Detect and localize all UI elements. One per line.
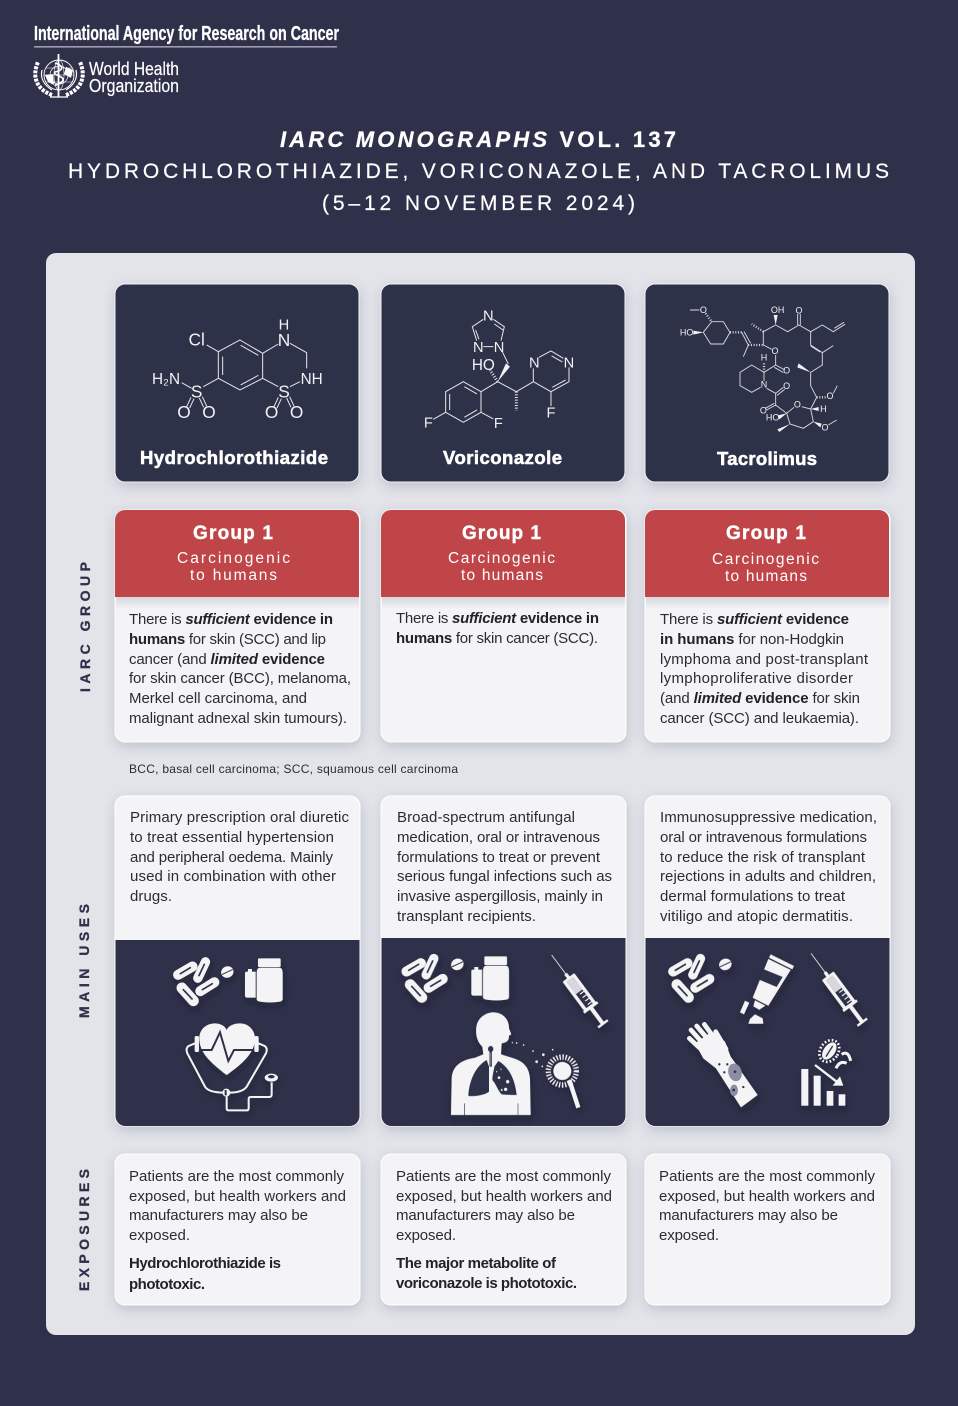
icon: WHO emblem	[35, 54, 83, 97]
panel: main uses hydrochlorothiazide: and peripheral oedema. Mainly	[130, 849, 334, 866]
IARC and WHO logo block	[34, 23, 339, 97]
panel: IARC group voriconazole: to humans	[461, 567, 543, 584]
icons: pills, bottles, heart and stethoscope	[171, 956, 283, 1110]
chemical structure: voriconazole: N	[494, 340, 504, 356]
panel: IARC group tacrolimus: Group 1	[726, 523, 806, 544]
panel: IARC group hydrochlorothiazide: Merkel cell carcinoma, and	[129, 690, 307, 707]
panel: main uses voriconazole: formulations to treat or prevent	[397, 849, 601, 866]
panel: exposures voriconazole	[381, 1154, 626, 1305]
panel: IARC group voriconazole: humans for skin cancer (SCC).	[396, 630, 598, 647]
panel: IARC group hydrochlorothiazide: Group 1	[193, 523, 273, 544]
dark icon area	[646, 938, 890, 1126]
chemical structure: tacrolimus: O	[700, 305, 707, 315]
title	[68, 127, 889, 215]
row label: IARC group: IARC GROUP	[77, 562, 93, 692]
panel: IARC group hydrochlorothiazide	[115, 510, 360, 742]
icons: pills, syringe, lungs, fungus	[400, 950, 611, 1115]
panel: IARC group hydrochlorothiazide: malignant adnexal skin tumours).	[129, 710, 347, 727]
chemical structure: voriconazole: N	[564, 355, 574, 371]
panel: exposures hydrochlorothiazide: manufacturers may also be	[129, 1207, 308, 1224]
chemical structure: voriconazole: N	[529, 355, 540, 371]
chemical structure: hydrochlorothiazide: H₂N	[152, 371, 180, 388]
panel: IARC group tacrolimus: Carcinogenic	[712, 551, 819, 568]
title: IARC MONOGRAPHS VOL. 137	[280, 127, 676, 152]
icon: round tablet	[449, 957, 465, 972]
chemical structure: hydrochlorothiazide: H	[279, 317, 289, 333]
evidence text: There is sufficient evidence in	[129, 611, 333, 628]
evidence text: There is sufficient evidence	[660, 611, 849, 628]
icons: pills, cream, syringe, hand, chart	[666, 948, 870, 1107]
panel: exposures hydrochlorothiazide: Hydrochlorothiazide is	[129, 1255, 281, 1272]
panel: main uses tacrolimus: vitiligo and atopic dermatitis.	[660, 908, 853, 925]
panel: main uses hydrochlorothiazide: used in combination with other	[130, 868, 336, 885]
uses text: Immunosuppressive medication,	[660, 809, 877, 826]
panel: main uses voriconazole: serious fungal infections such as	[397, 868, 612, 885]
chemical structure: hydrochlorothiazide: O	[202, 402, 216, 422]
drug name: Voriconazole	[443, 447, 562, 468]
panel: main uses tacrolimus: to reduce the risk of transplant	[660, 849, 866, 866]
panel: hydrochlorothiazide structure	[115, 284, 359, 482]
panel: main uses voriconazole: invasive aspergillosis, mainly in	[397, 888, 603, 905]
chemical structure: tacrolimus: OH	[771, 305, 784, 315]
panel: main uses hydrochlorothiazide: to treat essential hypertension	[130, 829, 334, 846]
chemical structure: tacrolimus: O	[783, 381, 790, 391]
chemical structure: hydrochlorothiazide: Cl	[188, 329, 205, 349]
chemical structure: tacrolimus: H	[761, 352, 767, 362]
panel: IARC group voriconazole: Group 1	[462, 523, 541, 544]
panel: IARC group tacrolimus: to humans	[725, 568, 807, 585]
dark icon area	[116, 940, 360, 1126]
chemical structure: tacrolimus: HO	[680, 328, 693, 338]
chemical structure: voriconazole: HO	[472, 357, 495, 374]
chemical structure: hydrochlorothiazide: O	[290, 402, 303, 422]
panel: main uses tacrolimus	[645, 796, 890, 1126]
chemical structure: voriconazole: F	[424, 415, 433, 431]
chemical structure: tacrolimus: O	[795, 306, 802, 316]
panel: main uses tacrolimus: rejections in adults and children,	[660, 868, 876, 885]
agency name: International Agency for Research on Cancer	[34, 23, 339, 45]
chemical structure: tacrolimus: O	[821, 422, 828, 432]
chemical structure: tacrolimus: H	[820, 404, 827, 414]
row label: exposures: EXPOSURES	[76, 1169, 92, 1291]
red group header	[645, 510, 889, 597]
icon: hand with skin patches	[689, 1024, 758, 1107]
panel: exposures tacrolimus	[645, 1154, 890, 1305]
chemical structure: voriconazole	[424, 309, 574, 432]
icon: round tablet	[219, 964, 235, 980]
chemical structure: tacrolimus	[680, 305, 845, 432]
main light panel	[46, 253, 915, 1335]
panel: main uses tacrolimus: oral or intravenous formulations	[660, 829, 867, 846]
chemical structure: hydrochlorothiazide: NH	[301, 371, 323, 388]
panel: IARC group hydrochlorothiazide: cancer (and limited evidence	[129, 651, 325, 668]
panel: exposures hydrochlorothiazide: exposed.	[129, 1227, 190, 1244]
panel: IARC group tacrolimus: cancer (SCC) and leukaemia).	[660, 710, 859, 727]
panel: main uses voriconazole: medication, oral or intravenous	[397, 829, 600, 846]
panel: main uses hydrochlorothiazide	[115, 796, 360, 1126]
organisation name: World Health	[89, 59, 179, 79]
panel: IARC group tacrolimus: (and limited evidence for skin	[660, 690, 860, 707]
chemical structure: hydrochlorothiazide: S	[191, 381, 202, 401]
panel: tacrolimus structure	[645, 284, 889, 482]
chemical structure: tacrolimus: O	[760, 406, 767, 416]
panel: IARC group tacrolimus: lymphoproliferative disorder	[660, 670, 853, 687]
title: (5–12 NOVEMBER 2024)	[322, 192, 635, 215]
icon: spores and fungus	[512, 1042, 578, 1108]
chemical structure: hydrochlorothiazide: N	[278, 330, 290, 350]
chemical structure: hydrochlorothiazide: O	[177, 402, 191, 422]
panel: exposures hydrochlorothiazide	[115, 1154, 360, 1305]
IARC and WHO logo block: Organization	[89, 76, 179, 96]
chemical structure: tacrolimus: O	[794, 400, 801, 410]
icon: cream tube	[740, 954, 794, 1024]
panel: voriconazole structure	[381, 284, 625, 482]
uses text: Primary prescription oral diuretic	[130, 809, 350, 826]
chemical structure: voriconazole: N	[473, 340, 484, 356]
chemical structure: hydrochlorothiazide	[152, 317, 323, 422]
panel: IARC group tacrolimus: lymphoma and post-transplant	[660, 651, 869, 668]
chemical structure: voriconazole: F	[547, 405, 556, 421]
chemical structure: tacrolimus: O	[783, 366, 790, 376]
panel: exposures hydrochlorothiazide: exposed, but health workers and	[129, 1188, 346, 1205]
chemical structure: hydrochlorothiazide: S	[278, 381, 290, 401]
icon: heart and stethoscope	[187, 1023, 278, 1110]
chemical structure: voriconazole: F	[494, 416, 503, 432]
icon: human body with lungs	[451, 1012, 531, 1115]
panel: exposures voriconazole: voriconazole is phototoxic.	[396, 1275, 577, 1292]
red group header	[381, 510, 625, 597]
chemical structure: hydrochlorothiazide: O	[265, 402, 278, 422]
icon: round tablet	[717, 957, 733, 972]
panel: exposures tacrolimus: exposed, but health workers and	[659, 1188, 875, 1205]
panel: IARC group hydrochlorothiazide: humans for skin (SCC) and lip	[129, 631, 326, 648]
panel: IARC group hydrochlorothiazide: Carcinogenic	[177, 550, 290, 567]
chemical structure: tacrolimus: N	[761, 379, 767, 389]
panel: IARC group voriconazole	[381, 510, 626, 742]
panel: exposures tacrolimus: Patients are the most commonly	[659, 1168, 876, 1185]
panel: exposures voriconazole: manufacturers may also be	[396, 1207, 575, 1224]
chemical structure: tacrolimus: O	[771, 346, 778, 356]
icon: declining bars and pathogen	[801, 1036, 851, 1106]
panel: main uses voriconazole: transplant recipients.	[397, 908, 536, 925]
panel: IARC group hydrochlorothiazide: to humans	[190, 567, 277, 584]
title: HYDROCHLOROTHIAZIDE, VORICONAZOLE, AND TACROLIMUS	[68, 160, 889, 183]
panel: IARC group tacrolimus: in humans for non-Hodgkin	[660, 631, 844, 648]
panel: IARC group tacrolimus	[645, 510, 890, 742]
panel: exposures hydrochlorothiazide: Patients are the most commonly	[129, 1168, 344, 1185]
panel: exposures voriconazole: The major metabolite of	[396, 1255, 557, 1272]
chemical structure: tacrolimus: HO	[766, 413, 779, 423]
panel: exposures voriconazole: exposed.	[396, 1227, 456, 1244]
footnote: BCC, basal cell carcinoma; SCC, squamous cell carcinoma	[129, 762, 458, 776]
panel: exposures tacrolimus: manufacturers may also be	[659, 1207, 838, 1224]
evidence text: There is sufficient evidence in	[396, 610, 599, 627]
panel: main uses tacrolimus: dermal formulations to treat	[660, 888, 846, 905]
panel: main uses voriconazole	[381, 796, 626, 1126]
uses text: Broad-spectrum antifungal	[397, 809, 575, 826]
dark icon area	[382, 938, 626, 1126]
panel: IARC group voriconazole: Carcinogenic	[448, 550, 555, 567]
panel: exposures voriconazole: Patients are the most commonly	[396, 1168, 612, 1185]
drug name: Hydrochlorothiazide	[140, 447, 328, 468]
row label: main uses: MAIN USES	[76, 904, 92, 1018]
panel: exposures tacrolimus: exposed.	[659, 1227, 719, 1244]
panel: exposures hydrochlorothiazide: phototoxic.	[129, 1276, 205, 1293]
panel: IARC group hydrochlorothiazide: for skin cancer (BCC), melanoma,	[129, 670, 351, 687]
panel: main uses hydrochlorothiazide: drugs.	[130, 888, 172, 905]
chemical structure: voriconazole: N	[483, 309, 494, 325]
drug name: Tacrolimus	[717, 448, 817, 469]
panel: exposures voriconazole: exposed, but health workers and	[396, 1188, 612, 1205]
red group header	[115, 510, 359, 597]
chemical structure: tacrolimus: O	[826, 391, 833, 401]
